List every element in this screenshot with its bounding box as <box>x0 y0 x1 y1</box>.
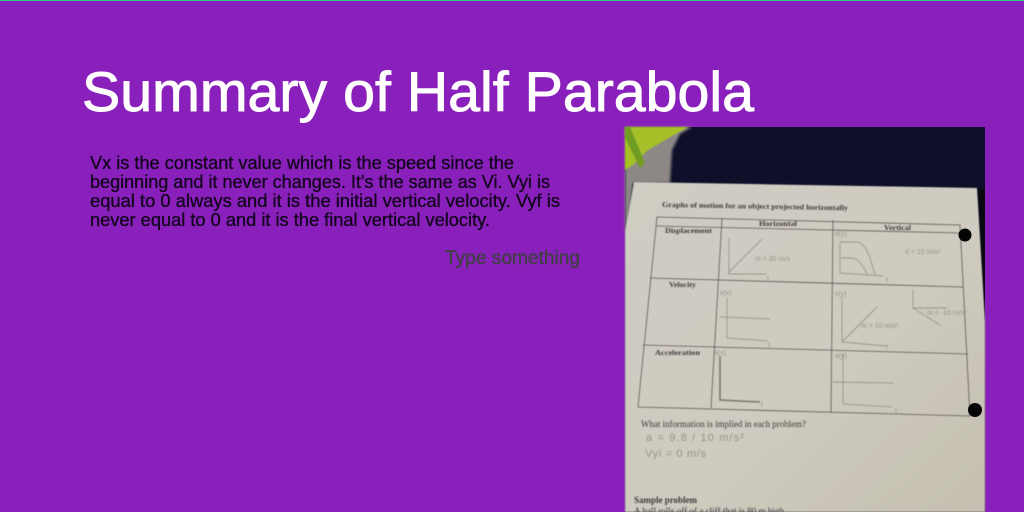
text block: summary: equal to 0 always and it is the initial vertical velocity. Vyf is <box>90 191 560 211</box>
graph: vertical displacement: d = 10 m/s² <box>905 249 941 256</box>
title: Summary of Half Parabola <box>82 60 755 123</box>
binder holes <box>958 228 982 417</box>
worksheet heading: Graphs of motion for an object projected horizontally <box>662 200 848 212</box>
top accent strip <box>0 0 1024 1</box>
graph: inset slope: m = -10 m/s² <box>927 310 967 317</box>
table headers: Vertical <box>884 223 911 232</box>
text block: summary: beginning and it never changes. It's the same as Vi. Vyi is <box>90 172 550 192</box>
graph: vertical velocity: v(y) <box>835 291 847 298</box>
graph: horizontal velocity: t <box>768 342 770 349</box>
graph: horizontal displacement <box>728 238 790 282</box>
graph: vertical displacement: t <box>886 277 888 284</box>
graph: vertical displacement <box>835 231 941 284</box>
graph: horizontal acceleration: t <box>761 402 763 409</box>
worksheet table <box>638 217 970 416</box>
text block: summary: Vx is the constant value which is the speed since the <box>90 153 514 173</box>
text block: summary <box>90 153 560 230</box>
worksheet question: What information is implied in each problem? <box>641 419 806 429</box>
placeholder text: Type something <box>445 248 580 269</box>
handwritten answers: Vyi = 0 m/s <box>645 448 706 460</box>
photo backdrop: dark blanket <box>625 127 985 512</box>
table headers: Acceleration <box>655 348 701 357</box>
table headers: Velocity <box>669 280 696 289</box>
sample problem: Sample problem <box>634 495 697 505</box>
graph: vertical velocity: m = 10 m/s² <box>861 323 899 330</box>
graph: vertical acceleration: t <box>895 408 897 415</box>
graph: inset slope <box>913 290 967 325</box>
handwritten answers <box>645 432 744 460</box>
graph: horizontal velocity <box>720 290 770 349</box>
graph: vertical displacement: d(y) <box>835 231 847 238</box>
graph: horizontal displacement: m = 30 m/s <box>755 256 790 263</box>
graph: vertical velocity: t <box>886 344 888 351</box>
graph: horizontal velocity: v(x) <box>720 290 732 297</box>
paper sheet <box>625 182 985 512</box>
graph: horizontal acceleration: a(x) <box>714 350 726 357</box>
graph: horizontal acceleration <box>714 350 763 409</box>
graph: vertical acceleration: a(y) <box>835 353 847 360</box>
text block: summary: never equal to 0 and it is the final vertical velocity. <box>90 210 490 230</box>
graph: vertical acceleration <box>833 353 897 415</box>
graph: vertical velocity <box>835 291 899 351</box>
table headers: Horizontal <box>759 219 797 228</box>
sample problem <box>634 495 784 512</box>
table headers: Displacement <box>665 226 713 235</box>
table headers <box>655 219 911 357</box>
handwritten answers: a = 9.8 / 10 m/s² <box>646 432 744 444</box>
photo: worksheet <box>625 127 985 512</box>
graph: horizontal displacement: t <box>767 275 769 282</box>
